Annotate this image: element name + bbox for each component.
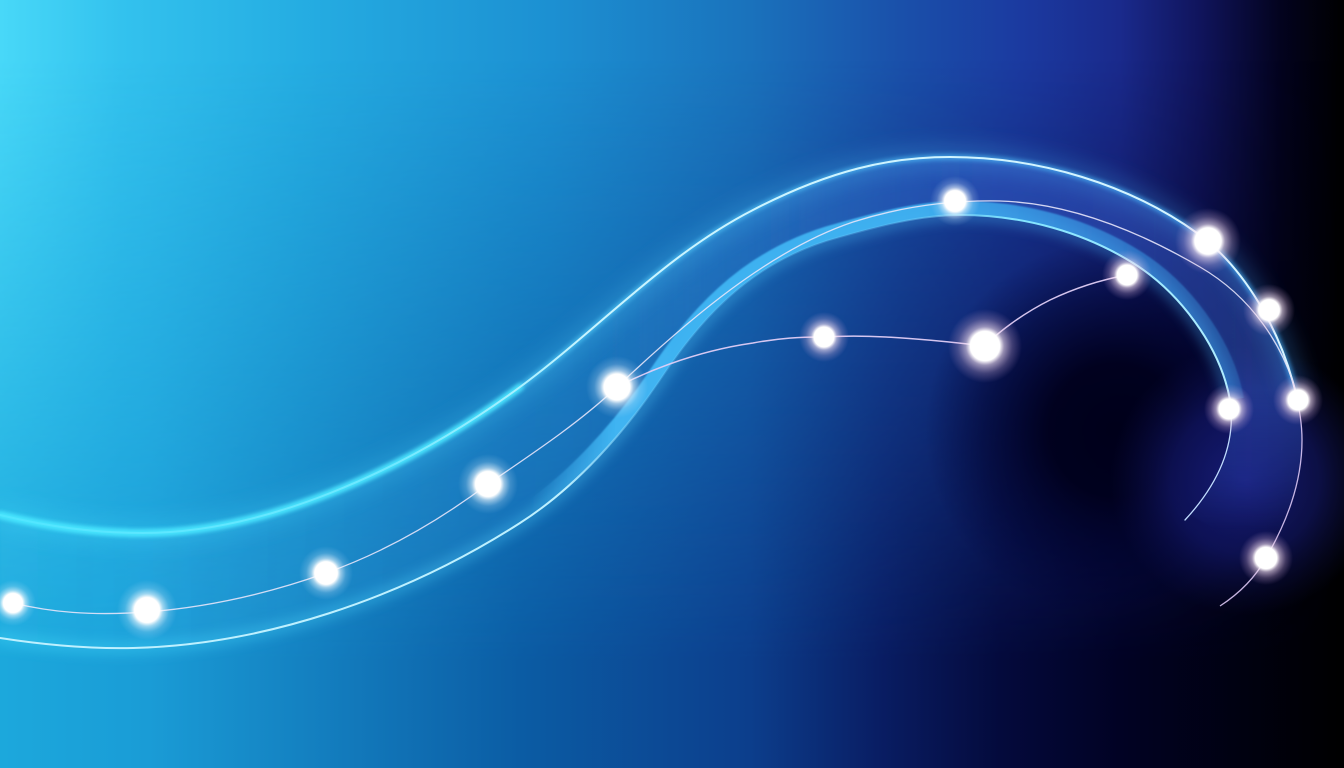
node: upper right — [1175, 208, 1241, 274]
node: top of arc — [930, 176, 980, 226]
upper ribbon edge — [0, 157, 1295, 533]
node: branch middle — [799, 312, 849, 362]
node: branch end — [1102, 250, 1152, 300]
node: right — [1243, 284, 1295, 336]
node: tail — [1239, 531, 1293, 585]
node: junction — [586, 356, 648, 418]
node: lower left — [117, 580, 177, 640]
branching thread — [617, 275, 1127, 387]
central thin thread — [13, 201, 1298, 614]
outer tail thread — [1220, 390, 1302, 606]
node: outer right — [1273, 375, 1323, 425]
node: inner right — [1204, 384, 1254, 434]
lower ribbon edge — [0, 215, 1231, 648]
node: far left — [0, 580, 36, 626]
node: lower middle — [299, 546, 353, 600]
node: branch large — [948, 309, 1022, 383]
node: on rising thread — [458, 454, 518, 514]
glowing nodes — [0, 176, 1323, 640]
ribbon band fill — [492, 158, 1302, 528]
